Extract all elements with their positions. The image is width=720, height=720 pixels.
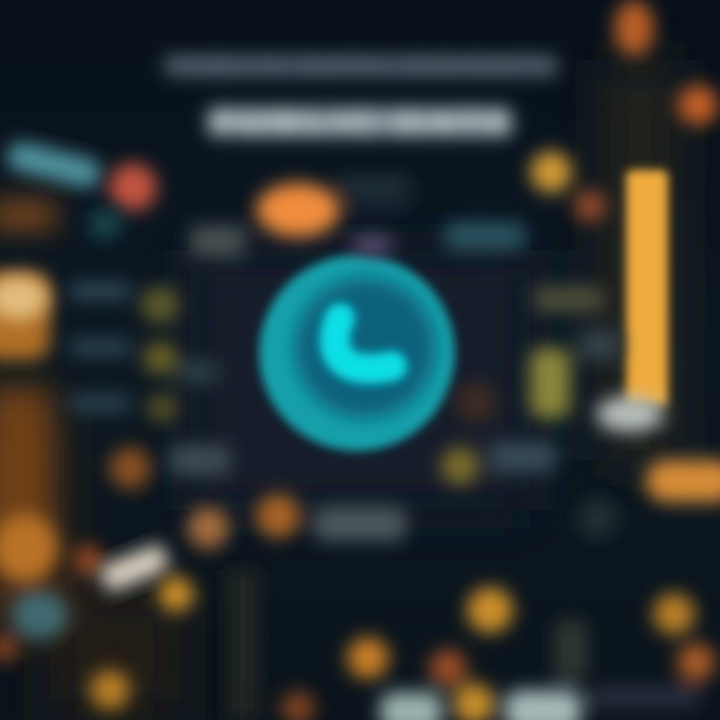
title line two: PUBLIC DATA xyxy=(210,102,510,143)
orange pill xyxy=(646,460,720,502)
teal pill xyxy=(4,139,104,191)
top centre labels xyxy=(190,178,525,257)
white ribbon xyxy=(98,542,171,594)
orange badge xyxy=(256,183,340,237)
amber block xyxy=(0,272,50,360)
icon: clock xyxy=(259,255,455,451)
title xyxy=(165,53,557,143)
title line one: PUBLIC DATA INSIGHTS xyxy=(165,53,555,80)
orange tall bar xyxy=(626,170,668,406)
right column xyxy=(441,0,720,538)
red dot xyxy=(109,163,157,211)
lower dots xyxy=(90,494,715,720)
left column xyxy=(0,139,230,661)
